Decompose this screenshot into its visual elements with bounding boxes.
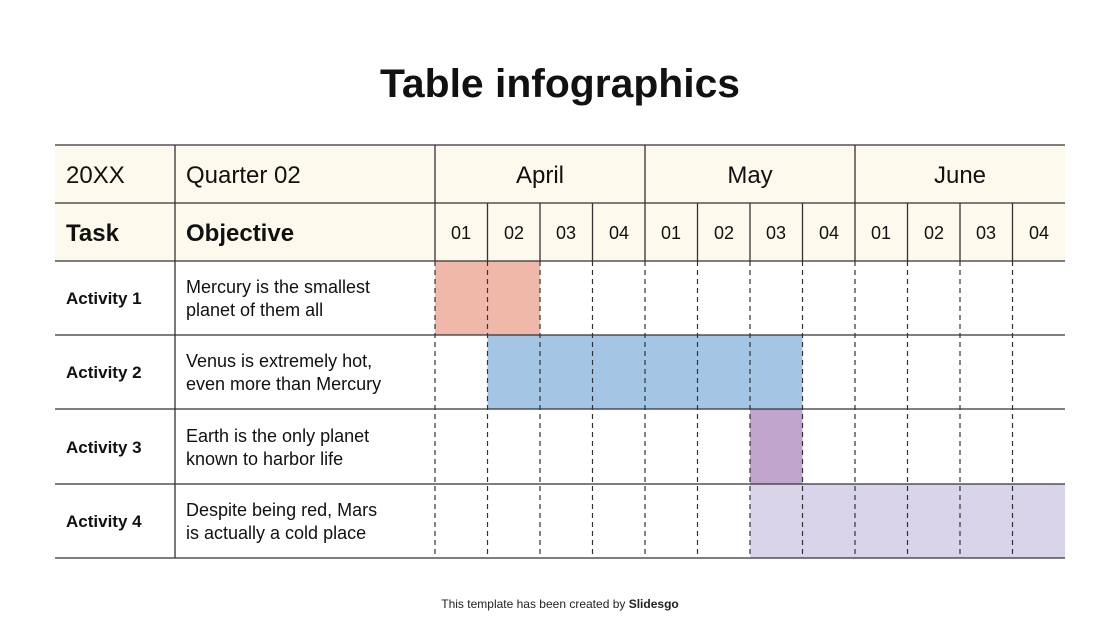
week numbers: 04 [1029,223,1049,243]
week numbers: 03 [556,223,576,243]
activity labels: Activity 2 [66,363,142,382]
objectives: Earth is the only planet [186,426,369,446]
bar: activity 1 [435,261,540,335]
week numbers: 02 [924,223,944,243]
title: Table infographics [380,62,740,106]
objectives: Despite being red, Mars [186,500,377,520]
header text: Objective [186,220,294,247]
objectives: Venus is extremely hot, [186,351,372,371]
header text: April [516,162,564,189]
table [55,145,1065,558]
objectives: Mercury is the smallest [186,277,370,297]
bar: activity 4 [750,484,1065,558]
objectives [186,277,381,543]
objectives: planet of them all [186,300,323,320]
activity labels: Activity 4 [66,512,142,531]
week numbers: 01 [871,223,891,243]
bar: activity 2 [488,335,802,409]
header text: Task [66,220,120,247]
objectives: known to harbor life [186,449,343,469]
week numbers: 01 [451,223,471,243]
footer credit: This template has been created by Slidesgo [441,597,679,611]
week numbers: 03 [976,223,996,243]
week numbers: 02 [714,223,734,243]
activity labels [66,289,142,531]
activity labels: Activity 3 [66,438,142,457]
header text: Quarter 02 [186,162,301,189]
week numbers: 04 [609,223,629,243]
week numbers: 04 [819,223,839,243]
week numbers: 02 [504,223,524,243]
header background [55,145,1065,261]
week numbers: 01 [661,223,681,243]
header text: May [727,162,773,189]
activity labels: Activity 1 [66,289,142,308]
objectives: even more than Mercury [186,374,381,394]
week numbers: 03 [766,223,786,243]
header text [66,162,986,247]
bar: activity 3 [750,409,802,484]
week numbers [451,223,1049,243]
header text: June [934,162,986,189]
objectives: is actually a cold place [186,523,366,543]
header text: 20XX [66,162,125,189]
